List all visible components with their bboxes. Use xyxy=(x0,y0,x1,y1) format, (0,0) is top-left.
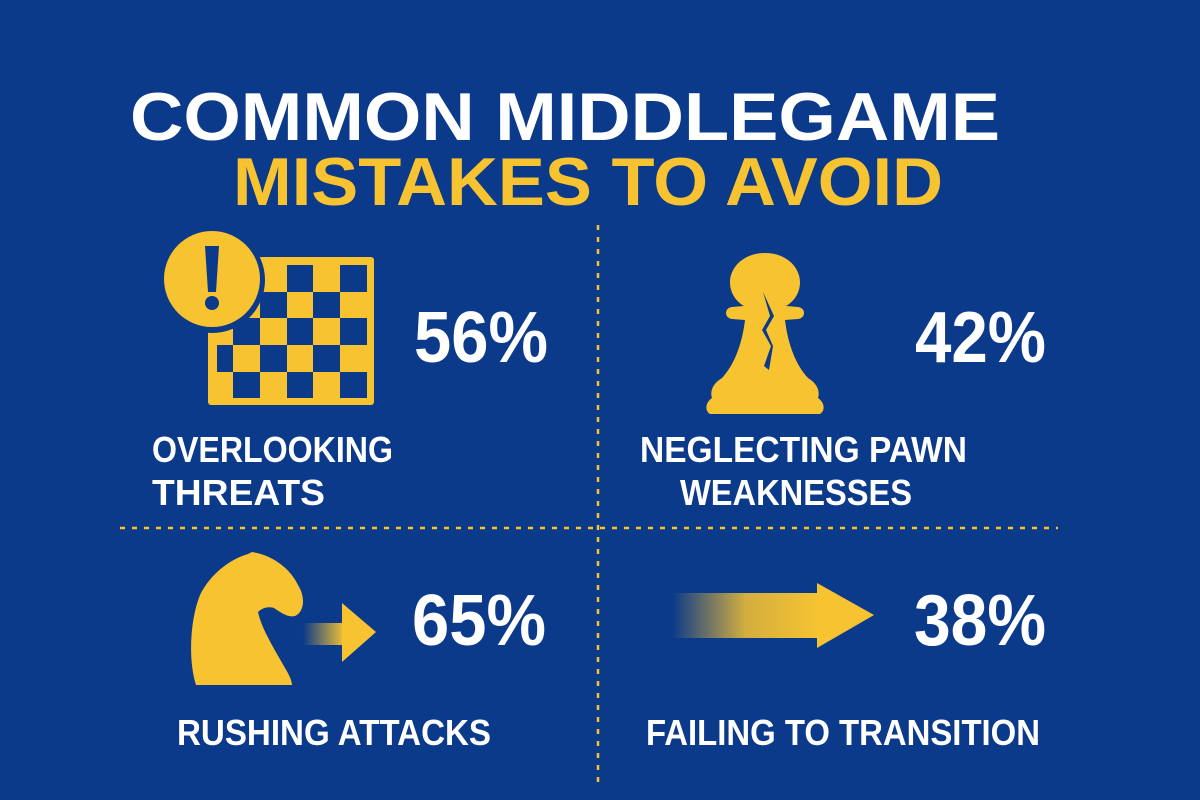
icon: motion arrow xyxy=(672,583,874,648)
icon: checkerboard with warning xyxy=(159,227,374,405)
label: neglecting pawn weaknesses: WEAKNESSES xyxy=(680,472,912,513)
title: COMMON MIDDLEGAME xyxy=(130,79,1000,155)
label: overlooking threats: THREATS xyxy=(152,472,325,513)
stat: 65%: 65% xyxy=(412,581,546,661)
label: rushing attacks: RUSHING ATTACKS xyxy=(177,712,491,753)
title: MISTAKES TO AVOID xyxy=(233,144,943,220)
label: overlooking threats: OVERLOOKING xyxy=(152,429,393,470)
icon: cracked pawn xyxy=(706,253,824,414)
title xyxy=(130,79,1000,220)
stat: 42%: 42% xyxy=(915,298,1046,378)
stat: 38%: 38% xyxy=(914,581,1046,661)
label: neglecting pawn weaknesses: NEGLECTING PAWN xyxy=(640,429,967,470)
stat: 56%: 56% xyxy=(414,298,548,378)
panel: rushing attacks xyxy=(177,552,546,753)
panel: neglecting pawn weaknesses xyxy=(640,253,1046,513)
icon: knight with arrow xyxy=(191,552,376,685)
panel: overlooking threats xyxy=(152,227,548,513)
panel: failing to transition xyxy=(646,581,1046,753)
label: failing to transition: FAILING TO TRANSITION xyxy=(646,712,1040,753)
